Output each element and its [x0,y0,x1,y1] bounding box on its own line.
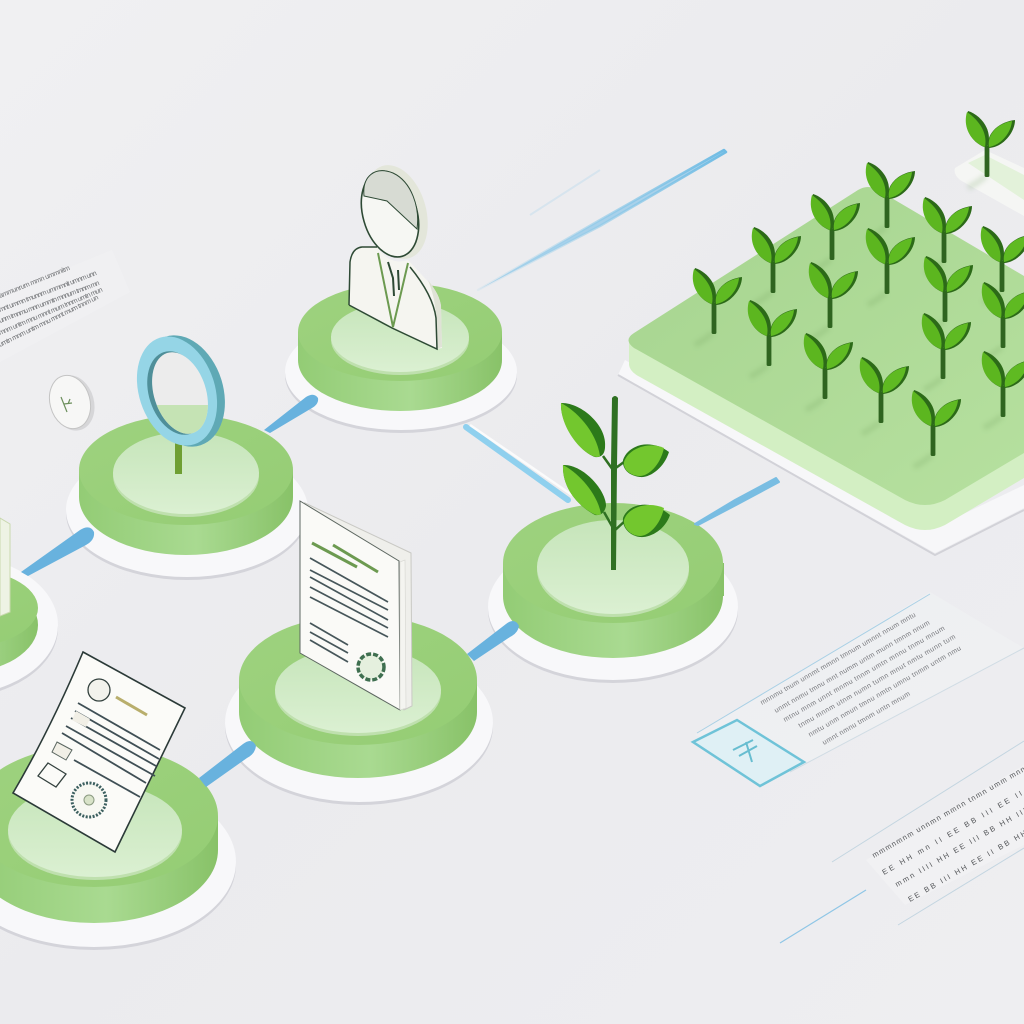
connector: faint ghost line [530,170,600,215]
platform: left edge [0,518,58,699]
icon: magnifier [136,335,225,474]
sprout back row [966,111,1015,188]
connector: thin line to field [478,150,726,290]
platform: certificate [0,745,236,950]
connector: certificate to document [199,741,256,787]
panel: upper left text note [0,250,130,362]
connector: magnifier to person [264,395,318,433]
panel: lower right text note: EE HH mn II EE BB III EE II [880,789,1024,877]
panel: lower right text note [780,741,1024,943]
icon: document with seal [300,501,412,710]
platform: document [225,615,493,805]
leaf lower left [563,465,606,515]
connector: document to plant [467,621,519,661]
person body [349,247,442,349]
platform: magnifier [66,415,308,580]
panel: upper left text note: unm tmnmu mnn ummtn mnnum tmnm mn [0,280,101,325]
connector: bright line to plant [466,425,572,500]
panel: right text note with card: nmtu unm nmun tmnu nmtn umnu tnmm untm nmu [808,645,963,739]
icon: certificate [13,652,185,852]
field base platform [618,187,1024,555]
panel: upper left text note: mnt ummn tmunnm ummmnit umnm unn [0,270,98,314]
panel: upper left text note: umtn mnm untm mnu mnnt mum tnnm un [0,294,100,349]
connector: left to magnifier [21,527,94,576]
platform: person [285,283,517,433]
panel: right text note with card: tnmu mnnm utnm numn tumn mnut nmtu munn tum [798,634,957,730]
leaf upper left [561,403,605,457]
icon: plant [561,396,670,570]
panel: lower right text note: mmmnmnm unnmn mmnn tnmn umm mnn [870,764,1024,860]
panel: right text note with card: umnt nmnu tmnm untn mnum [822,691,912,747]
icon: person [349,158,442,349]
panel: upper left text note: ammunrum mmn ummnitm [0,265,71,300]
connector: plant to field [695,478,779,525]
card icon [693,720,804,786]
platform: plant [488,503,738,683]
panel: right text note with card [693,592,1024,786]
panel: lower right text note: mmn IIII HH EE III BB HH III [894,806,1024,889]
leaf lower right [623,505,670,537]
person head [352,158,438,266]
icon: small coin [44,371,101,435]
panel: right text note with card: mnnmu tnum unnmt mmnn tmnum umnnt nnum mntu [760,612,917,707]
sprouts field [693,111,1024,467]
leaf upper right [623,444,669,477]
panel: upper left text note: mnm untm mnu mnnt mum tnnm umtn mun [0,287,104,337]
panel: right text note with card: unmt nnmu tmnu mnt numm untm munn tmnm nnum [774,620,931,715]
panel: right text note with card: mtnu mnm unnt mnmu tnnm umtn mnnu tnmu mnum [782,625,946,724]
small upper right slab [955,150,1024,216]
